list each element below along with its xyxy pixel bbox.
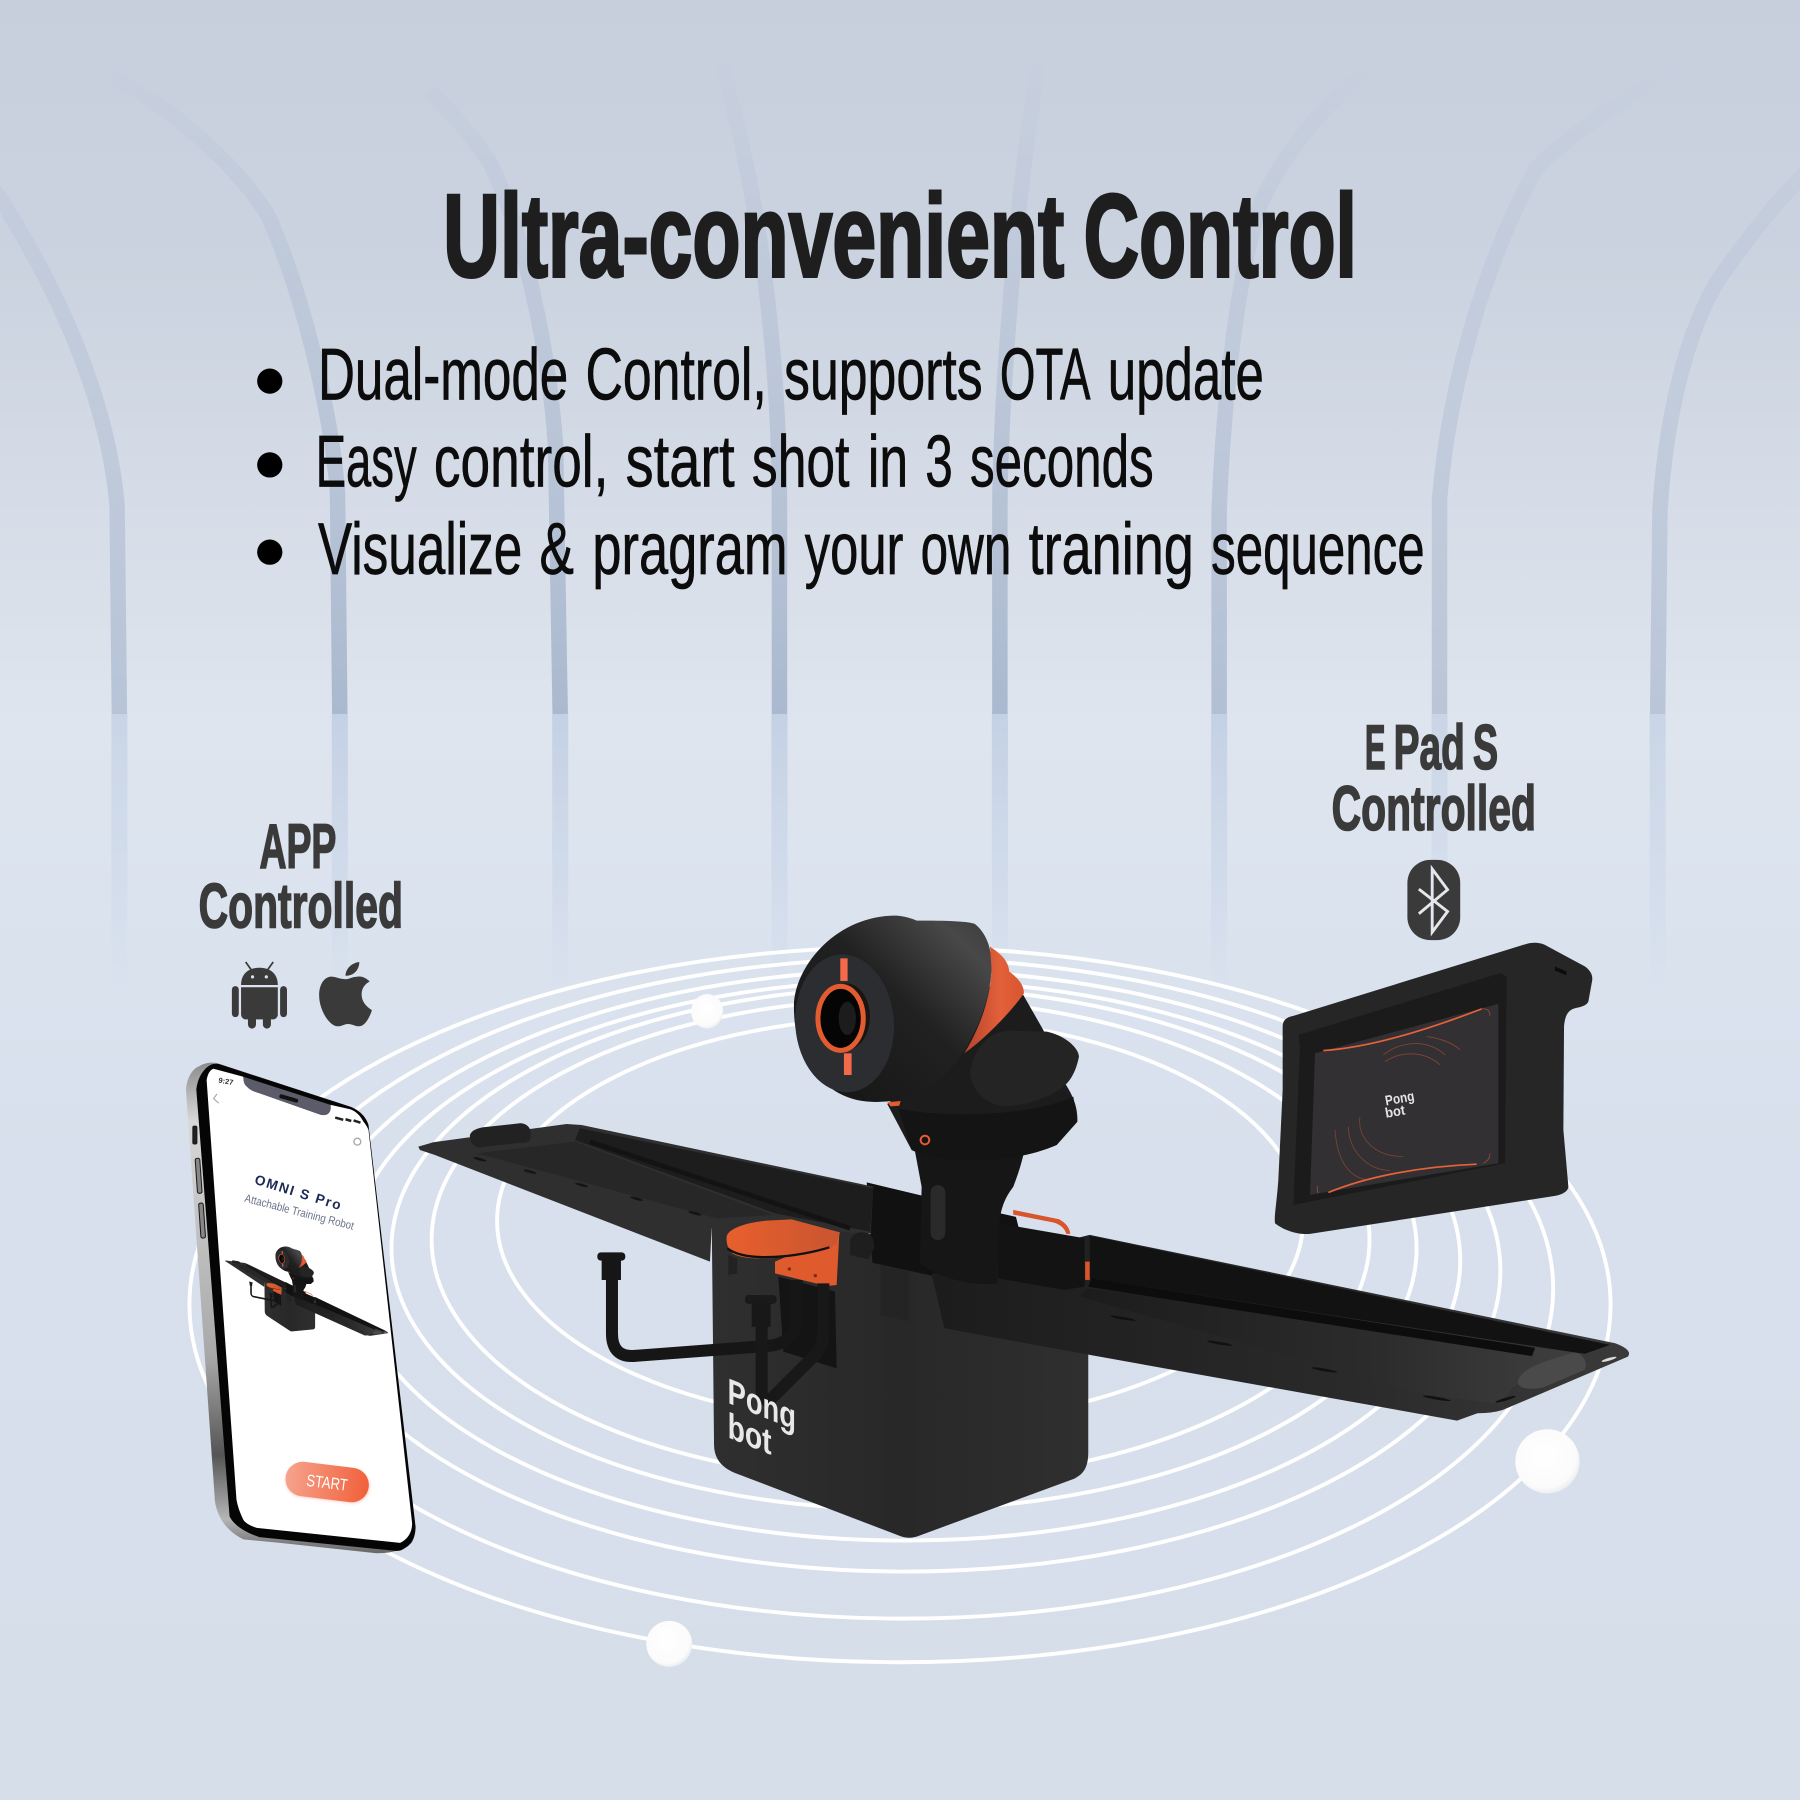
- bullet 3: pragram: [592, 507, 788, 590]
- background arches: [0, 63, 1800, 714]
- box side clip: [880, 1265, 909, 1321]
- bullet 3: own: [921, 507, 1011, 590]
- orange bars: [840, 958, 852, 1075]
- start button: [283, 1460, 371, 1505]
- settings icon: [354, 1138, 361, 1145]
- status marks: [887, 1101, 929, 1144]
- clip by cup: [728, 1255, 737, 1275]
- feature list: [257, 332, 1425, 590]
- phone status time: 9:27: [218, 1076, 234, 1087]
- bullet 1: supports: [784, 332, 983, 415]
- box logo: Pong: [728, 1370, 796, 1438]
- e pad s controller: [1275, 943, 1592, 1234]
- box logo: bot: [728, 1405, 772, 1463]
- orange cup: [727, 1219, 840, 1259]
- front rod: [762, 1283, 823, 1400]
- icon: android: [232, 962, 287, 1029]
- stem slot: [931, 1185, 945, 1240]
- robot: [418, 916, 1629, 1538]
- screen wave lines: [1317, 1009, 1490, 1193]
- bullet 2: [257, 420, 1154, 503]
- icon: bluetooth: [1407, 860, 1460, 940]
- neck stem: [912, 1133, 1028, 1284]
- icon: apple: [319, 962, 372, 1026]
- neck housing: [887, 983, 1077, 1161]
- screen logo: Pong: [1384, 1088, 1415, 1108]
- pad port: [1555, 967, 1567, 975]
- app controlled label: Controlled: [199, 872, 403, 942]
- phone side buttons: [193, 1126, 206, 1238]
- side knob: [970, 1031, 1079, 1106]
- start button: START: [305, 1471, 349, 1495]
- pad body: [1275, 943, 1592, 1234]
- muzzle ring: [818, 986, 863, 1050]
- e pad s label: Pad: [1394, 713, 1465, 783]
- bullet 1: OTA: [1000, 332, 1091, 415]
- bullet 1: Dual-mode: [318, 332, 568, 415]
- phone: [186, 1063, 416, 1553]
- concentric orbit rings: [189, 947, 1611, 1662]
- pad bezel: [1293, 973, 1507, 1205]
- gun head: [791, 916, 1079, 1284]
- e pad s label: S: [1473, 713, 1498, 783]
- bullet 1: update: [1108, 332, 1264, 415]
- e pad s label: E: [1365, 713, 1386, 783]
- pad screen: [1310, 1004, 1498, 1195]
- left tray: [418, 1123, 873, 1262]
- muzzle shadow: [822, 983, 870, 1050]
- rear rod: [612, 1260, 797, 1356]
- phone speaker: [279, 1094, 299, 1103]
- mini robot: [225, 1230, 388, 1358]
- end knob: [850, 1232, 874, 1259]
- bullet 3: traning: [1029, 507, 1194, 590]
- face disc: [791, 951, 899, 1096]
- bullet 3: sequence: [1211, 507, 1425, 590]
- title: Ultra-convenient: [443, 171, 1064, 303]
- bullet 1: [257, 332, 1264, 415]
- bracket: [775, 1233, 839, 1286]
- bullet 2: shot: [752, 420, 849, 503]
- app title: OMNI S Pro: [253, 1172, 343, 1213]
- bullet 1: Control,: [585, 332, 767, 415]
- housing lower band: [898, 1097, 1077, 1161]
- e pad s label: [1332, 713, 1536, 844]
- phone body: [186, 1063, 415, 1553]
- orange scarf: [964, 947, 1024, 1053]
- app subtitle: Attachable Training Robot: [243, 1193, 356, 1233]
- left box fittings: [597, 1219, 874, 1400]
- bullet 2: in: [868, 420, 908, 503]
- muzzle inner: [839, 1002, 856, 1035]
- app controlled label: [199, 812, 403, 942]
- title: Control: [1084, 171, 1357, 303]
- phone screen: [207, 1069, 412, 1543]
- bullet 2: seconds: [970, 420, 1154, 503]
- bullet 2: 3: [925, 420, 953, 503]
- bullet 2: control,: [434, 420, 608, 503]
- phone notch: [243, 1077, 331, 1115]
- bracket screws: [788, 1267, 817, 1277]
- back chevron: [214, 1094, 219, 1103]
- training box: [712, 1217, 1088, 1538]
- rod slot: [778, 1277, 837, 1368]
- bullet 2: start: [626, 420, 735, 503]
- bullet 2: Easy: [316, 420, 417, 503]
- bullet 3: [257, 507, 1425, 590]
- box logo: [728, 1370, 796, 1463]
- bullet 3: Visualize: [318, 507, 522, 590]
- arch reflections: [111, 714, 1666, 995]
- e pad s label: Controlled: [1332, 774, 1536, 844]
- screen logo: bot: [1384, 1102, 1407, 1121]
- ping pong balls: [646, 994, 1580, 1667]
- bullet 3: your: [805, 507, 903, 590]
- rear rail block: [867, 1182, 1033, 1286]
- phone status icons: [335, 1118, 360, 1123]
- screen logo: [1384, 1088, 1415, 1121]
- bullet 3: &: [540, 507, 574, 590]
- app controlled label: APP: [259, 812, 336, 882]
- shell: [794, 916, 992, 1102]
- right tray: [932, 1210, 1629, 1421]
- phone bezel: [196, 1064, 416, 1551]
